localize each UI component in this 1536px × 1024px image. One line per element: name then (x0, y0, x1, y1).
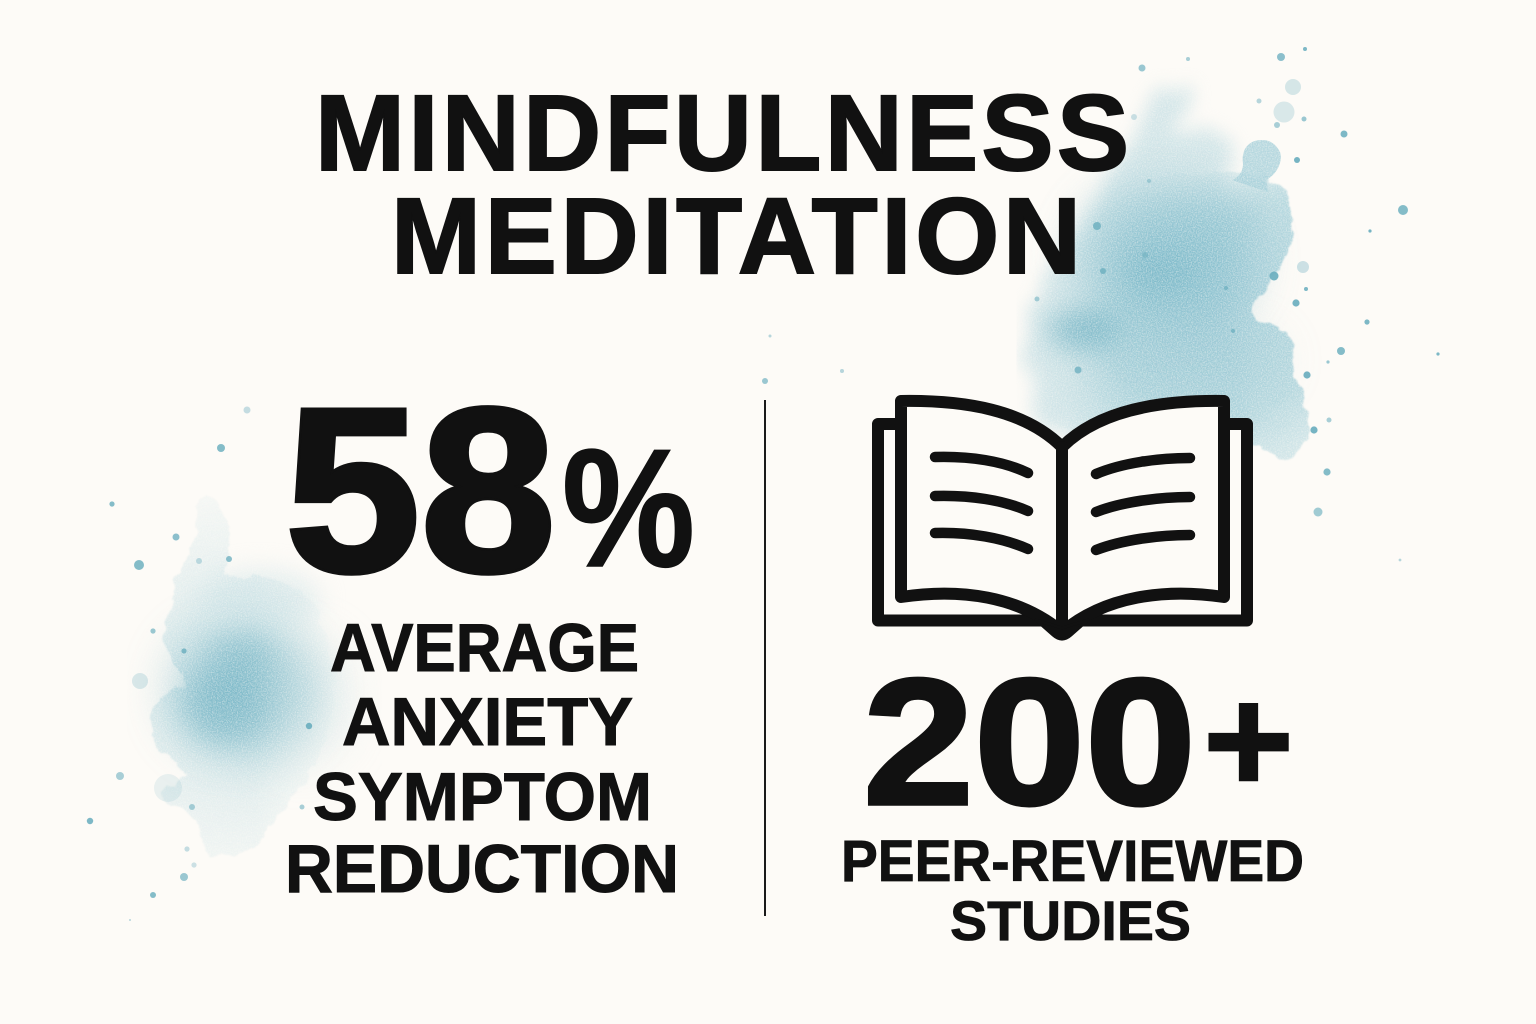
label: peer-reviewed studies (841, 829, 1304, 952)
icon: open book (878, 401, 1247, 639)
label: average anxiety symptom reduction: ANXIETY (342, 684, 633, 760)
label: average anxiety symptom reduction (285, 610, 679, 907)
label: average anxiety symptom reduction: AVERAGE (330, 610, 639, 686)
title (315, 72, 1129, 296)
panel: studies statistic (841, 401, 1304, 952)
plus sign: + (1203, 656, 1294, 824)
label: average anxiety symptom reduction: SYMPTOM (313, 759, 652, 835)
title line 2: MEDITATION (391, 175, 1081, 296)
label: peer-reviewed studies: STUDIES (950, 889, 1191, 952)
big number 200: 200 (863, 642, 1196, 843)
watercolor splash: lower left (150, 495, 346, 858)
watercolor splash: upper right (1026, 82, 1310, 458)
label: average anxiety symptom reduction: REDUCTION (285, 831, 679, 907)
panel: anxiety statistic (285, 359, 695, 907)
title line 1: MINDFULNESS (315, 72, 1129, 193)
paint splatter dots (87, 47, 1440, 921)
percent sign: % (562, 414, 695, 602)
big number 58: 58 (285, 359, 556, 621)
label: peer-reviewed studies: PEER-REVIEWED (841, 829, 1304, 894)
